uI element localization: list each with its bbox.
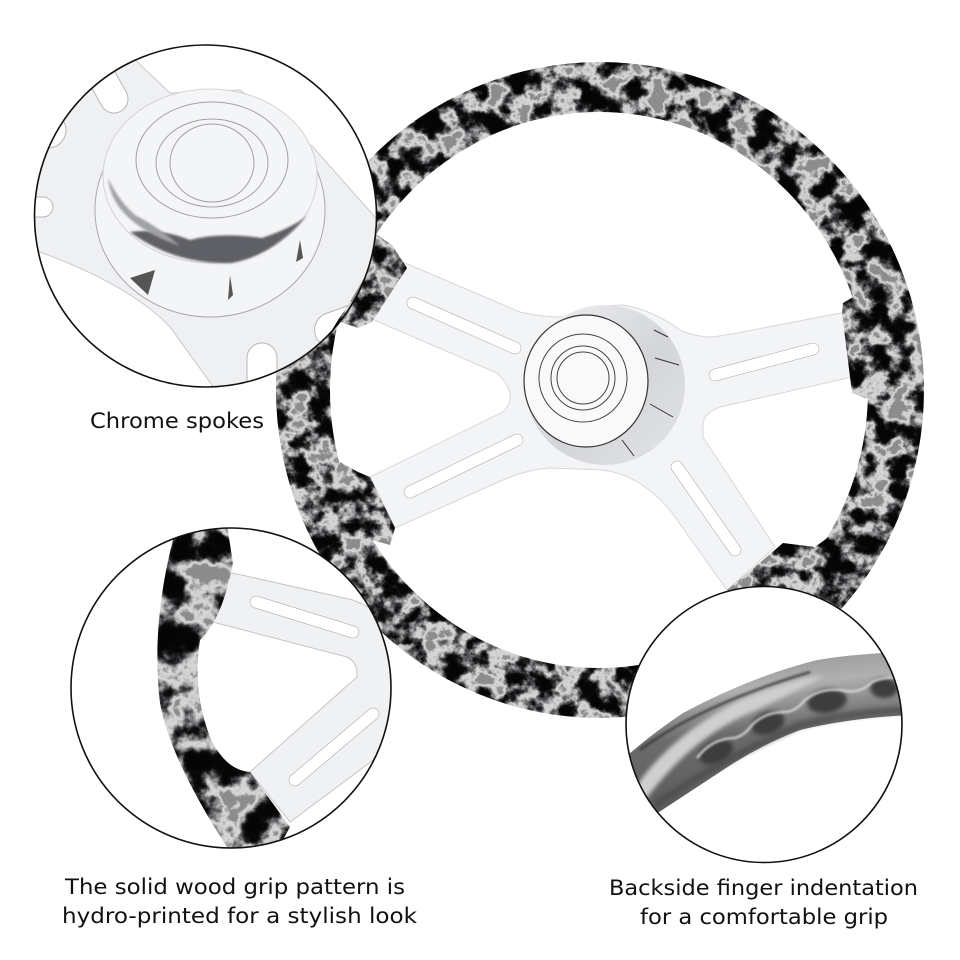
inset circle: finger indentation — [620, 586, 910, 862]
caption: finger indentation: Backside finger indentation — [609, 876, 918, 900]
caption: chrome spokes: Chrome spokes — [90, 409, 264, 433]
dimple ridge highlight — [697, 677, 895, 758]
lower shadow — [655, 710, 905, 805]
chrome plate close-up — [20, 55, 382, 392]
chrome reflection — [130, 212, 310, 263]
inset circle: chrome spokes — [34, 44, 378, 388]
chrome hub — [524, 305, 685, 465]
spoke slots — [410, 303, 813, 550]
hydro-printed grip rim — [260, 50, 940, 730]
caption: finger indentation: for a comfortable grip — [640, 905, 888, 929]
plate slots — [35, 72, 348, 382]
hub close-up — [94, 170, 326, 318]
rim back side — [630, 653, 901, 812]
caption: grip pattern: The solid wood grip pattern is — [64, 875, 405, 899]
caption: grip pattern — [62, 875, 418, 928]
main steering wheel — [260, 50, 940, 730]
grip edge — [332, 280, 364, 330]
light band — [632, 675, 825, 800]
spokes close-up — [205, 572, 400, 822]
chrome spoke plate — [365, 260, 852, 590]
inset circle: grip pattern — [71, 520, 400, 860]
dark groove — [640, 672, 810, 750]
caption: finger indentation — [609, 876, 918, 929]
caption: grip pattern: hydro-printed for a stylish look — [62, 904, 418, 928]
finger dimples — [695, 678, 898, 770]
grip close-up — [157, 528, 290, 848]
